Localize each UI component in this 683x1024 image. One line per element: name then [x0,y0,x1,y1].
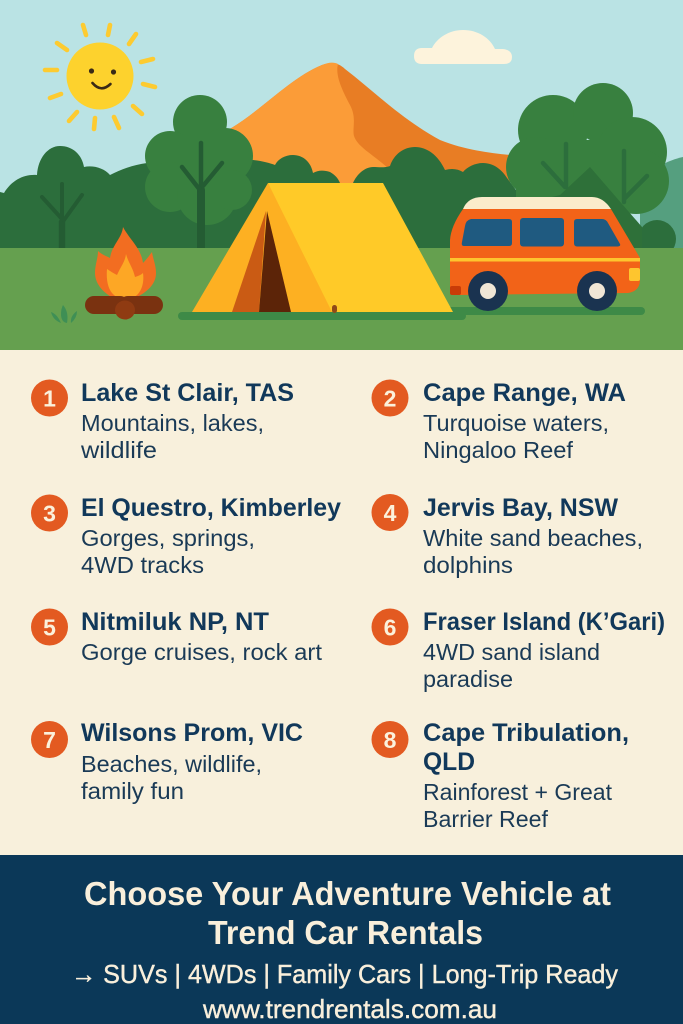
icon: grass tuft [51,305,77,323]
item 8 [372,719,629,832]
item 5 [31,608,323,665]
panel: footer call to action [0,855,683,1024]
item 4: White sand beaches, [423,525,643,551]
item 6: 4WD sand island [423,639,600,665]
item 1 [31,379,294,463]
panel: destinations list [0,350,683,855]
item 8: Barrier Reef [423,806,549,832]
icon: smiling sun [45,25,155,129]
item 2: Ningaloo Reef [423,437,574,463]
item 2: Cape Range, WA [423,379,626,407]
tree: left trunk [42,184,82,248]
item 6: 6 [384,614,396,640]
item 2 [372,379,626,463]
footer heading: Choose Your Adventure Vehicle at [84,875,611,912]
item 5: Nitmiluk NP, NT [81,608,269,636]
item 6: Fraser Island (K’Gari) [423,608,665,636]
item 3: 3 [43,500,56,526]
forest backdrop [0,146,676,258]
item 7: 7 [43,727,56,753]
website url: www.trendrentals.com.au [202,994,497,1024]
item 7: Wilsons Prom, VIC [81,719,303,747]
ground [0,248,683,350]
item 6 [372,608,665,692]
item 7: family fun [81,778,184,804]
footer background [0,855,683,1024]
item 8: Cape Tribulation, [423,719,629,747]
item 1: 1 [43,386,56,412]
footer heading: Trend Car Rentals [208,914,483,951]
vehicle types line: → SUVs | 4WDs | Family Cars | Long-Trip Ready [71,959,618,989]
item 4: 4 [384,500,397,526]
teal hill [640,157,683,248]
item 7: Beaches, wildlife, [81,751,262,777]
list background [0,350,683,855]
item 5: Gorge cruises, rock art [81,639,323,665]
footer heading [84,875,611,951]
tree: centre [145,95,253,248]
item 3: El Questro, Kimberley [81,494,341,522]
item 8: 8 [384,727,397,753]
item 5: 5 [43,614,56,640]
item 4: dolphins [423,552,513,578]
item 6: paradise [423,666,513,692]
item 7 [31,719,303,804]
item 8: QLD [423,748,475,776]
item 3 [31,494,341,578]
item 1: Lake St Clair, TAS [81,379,294,407]
ground shadows [178,307,645,320]
item 3: Gorges, springs, [81,525,255,551]
tree: right canopy [506,83,669,248]
mountain [228,63,510,200]
item 2: Turquoise waters, [423,410,609,436]
icon: tent [192,183,453,313]
panel: camping scene [0,0,683,350]
item 8: Rainforest + Great [423,779,613,805]
icon: camper van [450,197,640,311]
item 4: Jervis Bay, NSW [423,494,618,522]
item 1: Mountains, lakes, [81,410,264,436]
item 4 [372,494,643,578]
sky [0,0,683,250]
icon: cloud [414,30,512,64]
item 3: 4WD tracks [81,552,204,578]
item 2: 2 [384,386,396,412]
icon: campfire [85,227,163,320]
item 1: wildlife [80,437,157,463]
